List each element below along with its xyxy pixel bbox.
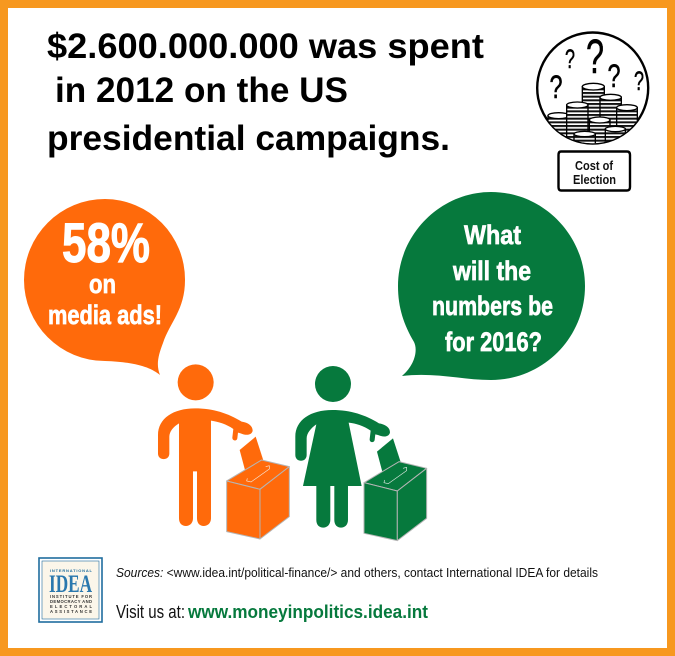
speech bubble: 58% on media ads: on bbox=[89, 269, 116, 299]
voters illustration bbox=[158, 364, 427, 541]
logo: International IDEA: INSTITUTE FOR bbox=[50, 594, 92, 599]
logo: International IDEA: INTERNATIONAL bbox=[50, 568, 93, 573]
icon: coins and question marks bbox=[537, 31, 648, 147]
ballot box: green bbox=[364, 462, 427, 541]
logo: International IDEA: ASSISTANCE bbox=[50, 609, 92, 614]
label: cost of election: Election bbox=[573, 172, 616, 187]
speech bubble: 58% on media ads bbox=[24, 199, 185, 375]
icon: coins and question marks: ? bbox=[565, 44, 575, 74]
figure: woman voting bbox=[295, 366, 401, 528]
logo: International IDEA: ELECTORAL bbox=[50, 604, 92, 609]
title: in 2012 on the US bbox=[55, 71, 348, 110]
sources note: Sources: <www.idea.int/political-finance/> and others, contact International IDEA for details bbox=[116, 565, 598, 580]
label: cost of election bbox=[558, 152, 630, 190]
speech bubble: 58% on media ads: media ads! bbox=[48, 300, 162, 330]
speech bubble: what will the numbers be: numbers be bbox=[432, 291, 553, 321]
logo: International IDEA bbox=[39, 558, 102, 622]
figure: man voting bbox=[158, 364, 264, 526]
icon: cost of election bbox=[537, 31, 648, 190]
icon: coins and question marks: ? bbox=[608, 58, 620, 94]
icon: coins and question marks: ? bbox=[586, 31, 604, 84]
ballot box: orange bbox=[227, 460, 289, 539]
speech bubble: what will the numbers be bbox=[398, 192, 585, 380]
icon: coins and question marks: ? bbox=[634, 66, 644, 96]
logo: International IDEA: DEMOCRACY AND bbox=[50, 599, 92, 604]
label: cost of election: Cost of bbox=[575, 158, 614, 173]
speech bubble: 58% on media ads: 58% bbox=[62, 211, 150, 274]
icon: coins and question marks: ? bbox=[550, 69, 562, 105]
title: presidential campaigns. bbox=[47, 119, 450, 158]
title: $2.600.000.000 was spent bbox=[47, 27, 484, 66]
speech bubble: what will the numbers be: for 2016? bbox=[445, 327, 542, 357]
logo: International IDEA: IDEA bbox=[49, 571, 92, 598]
speech bubble: what will the numbers be: What bbox=[464, 220, 521, 250]
speech bubble: what will the numbers be: will the bbox=[452, 256, 531, 286]
title bbox=[47, 27, 484, 158]
visit us link: www.moneyinpolitics.idea.int bbox=[187, 602, 428, 622]
visit us link: Visit us at: bbox=[116, 602, 185, 622]
